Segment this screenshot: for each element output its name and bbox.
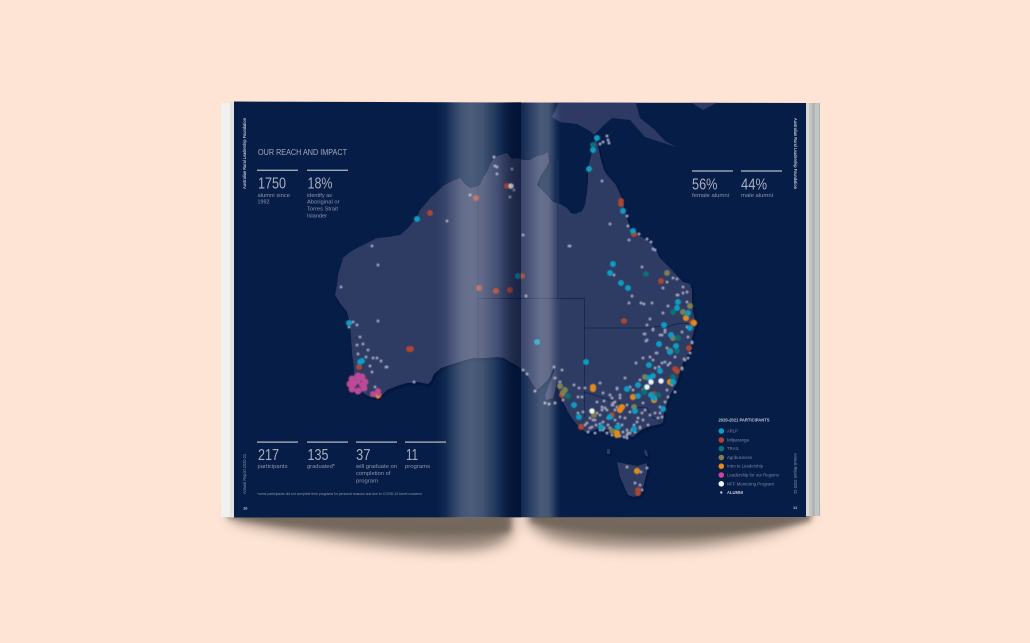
NFF Mentoring Program participant locations xyxy=(511,186,661,411)
stat: 135 graduated: graduated* xyxy=(307,464,336,470)
legend item: Agribusiness: Agribusiness xyxy=(727,455,753,460)
running head: left page: Australian Rural Leadership Foundation xyxy=(242,118,247,189)
stat: 37 will graduate: program xyxy=(356,478,378,484)
stat: identify as Aboriginal or Torres Strait Islander xyxy=(307,170,348,219)
stat: male alumni: male alumni xyxy=(741,193,773,199)
stat: 217 participants xyxy=(257,441,298,470)
spine highlight and fold shading xyxy=(436,102,561,518)
legend item: TRAIL: TRAIL xyxy=(727,446,739,451)
stat: male alumni xyxy=(741,170,782,199)
stat: 217 participants: participants xyxy=(258,464,288,470)
alumni locations xyxy=(341,136,692,490)
stat: female alumni xyxy=(692,170,733,199)
legend title: 2020-2021 PARTICIPANTS xyxy=(718,418,770,422)
stat: 11 programs: programs xyxy=(405,464,430,470)
page number 16: 16 xyxy=(243,506,248,510)
Intro to Leadership participant locations xyxy=(378,318,694,471)
legend item: Milparanga: Milparanga xyxy=(727,438,749,442)
map and data xyxy=(335,100,722,497)
legend item: NFF Mentoring Program: NFF Mentoring Program xyxy=(727,481,774,486)
stat: identify as Aboriginal or Torres Strait Islander: Islander xyxy=(307,213,327,219)
left page edge xyxy=(221,102,234,518)
legend item: Alumni: ALUMNI xyxy=(727,490,743,495)
map: state borders xyxy=(478,160,692,423)
stat: identify as Aboriginal or Torres Strait Islander: Torres Strait xyxy=(307,206,338,212)
running foot: right page: Annual Report 2020-21 xyxy=(793,453,798,495)
legend item: Intro to Leadership: Intro to Leadership xyxy=(727,464,763,469)
infographic: annual report spread mockup xyxy=(221,102,820,560)
right page edge xyxy=(806,103,820,516)
map: Australia mainland xyxy=(335,136,696,438)
stat: female alumni: 56% xyxy=(692,176,718,194)
stat: 37 will graduate xyxy=(355,441,397,484)
legend item: ARLP: ARLP xyxy=(727,428,738,434)
stat: 37 will graduate: completion of xyxy=(356,471,391,477)
stat: 217 participants: 217 xyxy=(258,447,279,464)
stat: identify as Aboriginal or Torres Strait Islander: identify as xyxy=(307,193,332,199)
Agribusiness participant locations xyxy=(560,273,690,431)
map: Papua New Guinea xyxy=(552,100,722,147)
heading: OUR REACH AND IMPACT xyxy=(258,147,348,157)
stat: 135 graduated xyxy=(307,441,348,470)
ARLP participant locations xyxy=(349,138,690,429)
stat: alumni since 1992: alumni since xyxy=(258,193,290,199)
stat: identify as Aboriginal or Torres Strait Islander: 18% xyxy=(308,176,333,192)
page number 11: 11 xyxy=(793,505,798,510)
Leadership for our Regions participant clusters xyxy=(346,372,382,399)
stat: 135 graduated: 135 xyxy=(308,447,328,464)
legend item: Leadership for our Regions: Leadership for our Regions xyxy=(727,472,780,478)
running head: right page: Australian Rural Leadership Foundation xyxy=(793,118,798,189)
stat: alumni since 1992: 1750 xyxy=(258,176,286,192)
TRAIL participant locations xyxy=(568,145,678,427)
stat: identify as Aboriginal or Torres Strait Islander: Aboriginal or xyxy=(307,200,340,206)
stat: 37 will graduate: will graduate on xyxy=(355,464,397,470)
stat: female alumni: female alumni xyxy=(692,193,729,199)
stat: 11 programs xyxy=(405,441,446,470)
legend: 2020-2021 participants xyxy=(718,418,780,495)
stat: male alumni: 44% xyxy=(741,176,767,194)
footnote: *some participants did not complete their programs for personal reasons and due to COVID-19 travel concerns xyxy=(257,492,422,496)
page spread background xyxy=(234,102,806,518)
stat: alumni since 1992: 1992 xyxy=(258,200,270,206)
running foot: left page: Annual Report 2020-21 xyxy=(242,454,247,494)
stat: 11 programs: 11 xyxy=(406,447,418,464)
book shadow xyxy=(232,510,812,550)
map: Tasmania and Bass Strait islands xyxy=(607,449,648,497)
stat: 37 will graduate: 37 xyxy=(356,447,370,464)
Milparanga participant locations xyxy=(359,186,692,493)
stat: alumni since 1992 xyxy=(257,170,298,206)
shadow under book edge xyxy=(228,510,812,536)
